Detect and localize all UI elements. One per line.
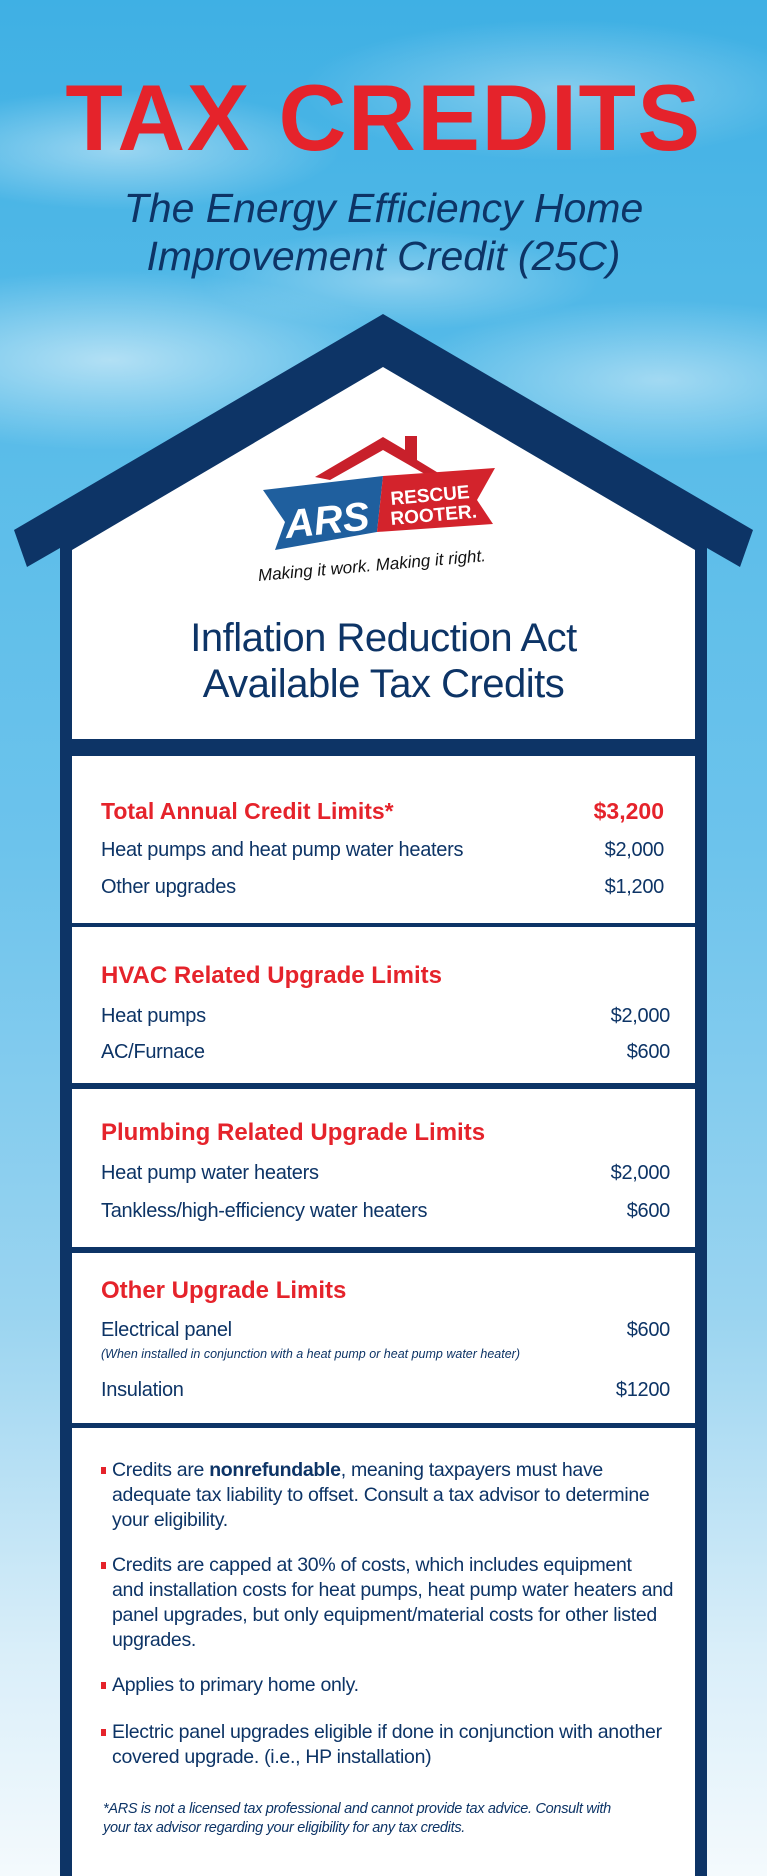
- panel: hvac: [101, 962, 670, 1063]
- logo: RESCUE: [390, 482, 470, 510]
- bullet 4: covered upgrade. (i.e., HP installation): [112, 1746, 431, 1768]
- logo: ARS: [282, 494, 372, 547]
- subtitle: The Energy Efficiency Home: [124, 185, 643, 231]
- panel: other: $1200: [616, 1379, 670, 1401]
- panel: hvac: Heat pumps: [101, 1005, 206, 1027]
- logo blue banner: [263, 476, 383, 550]
- bullet 1: your eligibility.: [112, 1509, 228, 1531]
- bullet 3: Applies to primary home only.: [112, 1674, 359, 1696]
- heading: [190, 616, 577, 706]
- panel: total annual: Other upgrades: [101, 876, 236, 898]
- footnote: *ARS is not a licensed tax professional and cannot provide tax advice. Consult with: [103, 1801, 611, 1817]
- panel: hvac: AC/Furnace: [101, 1041, 205, 1063]
- tagline: Making it work. Making it right.: [257, 546, 487, 585]
- footnote: [102, 1801, 611, 1836]
- panel: total annual: Total Annual Credit Limits*: [101, 798, 394, 824]
- panel: plumbing: Plumbing Related Upgrade Limits: [101, 1119, 485, 1146]
- panel: hvac: HVAC Related Upgrade Limits: [101, 962, 442, 989]
- heading: Inflation Reduction Act: [190, 616, 577, 660]
- panel: total annual: Heat pumps and heat pump water heaters: [101, 839, 463, 861]
- panel: hvac: $2,000: [611, 1005, 670, 1027]
- logo: ROOTER.: [390, 501, 478, 530]
- bullet 1: [101, 1459, 649, 1531]
- panel: other: Other Upgrade Limits: [101, 1277, 346, 1304]
- bullet 2: upgrades.: [112, 1629, 196, 1651]
- sky clouds: [0, 0, 767, 700]
- panel: other: Electrical panel: [101, 1319, 232, 1341]
- logo roof: [315, 436, 445, 480]
- bullet 2: Credits are capped at 30% of costs, which includes equipment: [112, 1554, 632, 1576]
- logo: [263, 436, 495, 550]
- bullet 1: Credits are nonrefundable, meaning taxpayers must have: [112, 1459, 603, 1481]
- panel: total annual: [101, 798, 664, 898]
- bullet 2: [101, 1554, 673, 1651]
- panel: plumbing: $600: [627, 1200, 670, 1222]
- panel: plumbing: Tankless/high-efficiency water heaters: [101, 1200, 427, 1222]
- panel: plumbing: [101, 1119, 670, 1222]
- subtitle: Improvement Credit (25C): [147, 233, 620, 279]
- panel: total annual: $3,200: [594, 798, 664, 824]
- panel: notes: [101, 1459, 673, 1768]
- footnote: your tax advisor regarding your eligibility for any tax credits.: [103, 1820, 465, 1836]
- panel: plumbing: Heat pump water heaters: [101, 1162, 319, 1184]
- bullet 4: [101, 1721, 662, 1768]
- panel: other: (When installed in conjunction with a heat pump or heat pump water heater): [101, 1347, 520, 1361]
- panel: total annual: $2,000: [605, 839, 664, 861]
- bullet 4: Electric panel upgrades eligible if done in conjunction with another: [112, 1721, 662, 1743]
- bullet 2: and installation costs for heat pumps, heat pump water heaters and: [112, 1579, 673, 1601]
- heading: Available Tax Credits: [203, 662, 564, 706]
- panel: other: [101, 1277, 670, 1401]
- panel: plumbing: $2,000: [611, 1162, 670, 1184]
- panel: hvac: $600: [627, 1041, 670, 1063]
- panel: other: Insulation: [101, 1379, 184, 1401]
- panel: other: $600: [627, 1319, 670, 1341]
- title: TAX CREDITS: [65, 65, 702, 170]
- logo red banner: [377, 468, 495, 532]
- panel: total annual: $1,200: [605, 876, 664, 898]
- bullet 2: panel upgrades, but only equipment/material costs for other listed: [112, 1604, 657, 1626]
- subtitle: [124, 185, 643, 279]
- bullet 1: adequate tax liability to offset. Consult a tax advisor to determine: [112, 1484, 649, 1506]
